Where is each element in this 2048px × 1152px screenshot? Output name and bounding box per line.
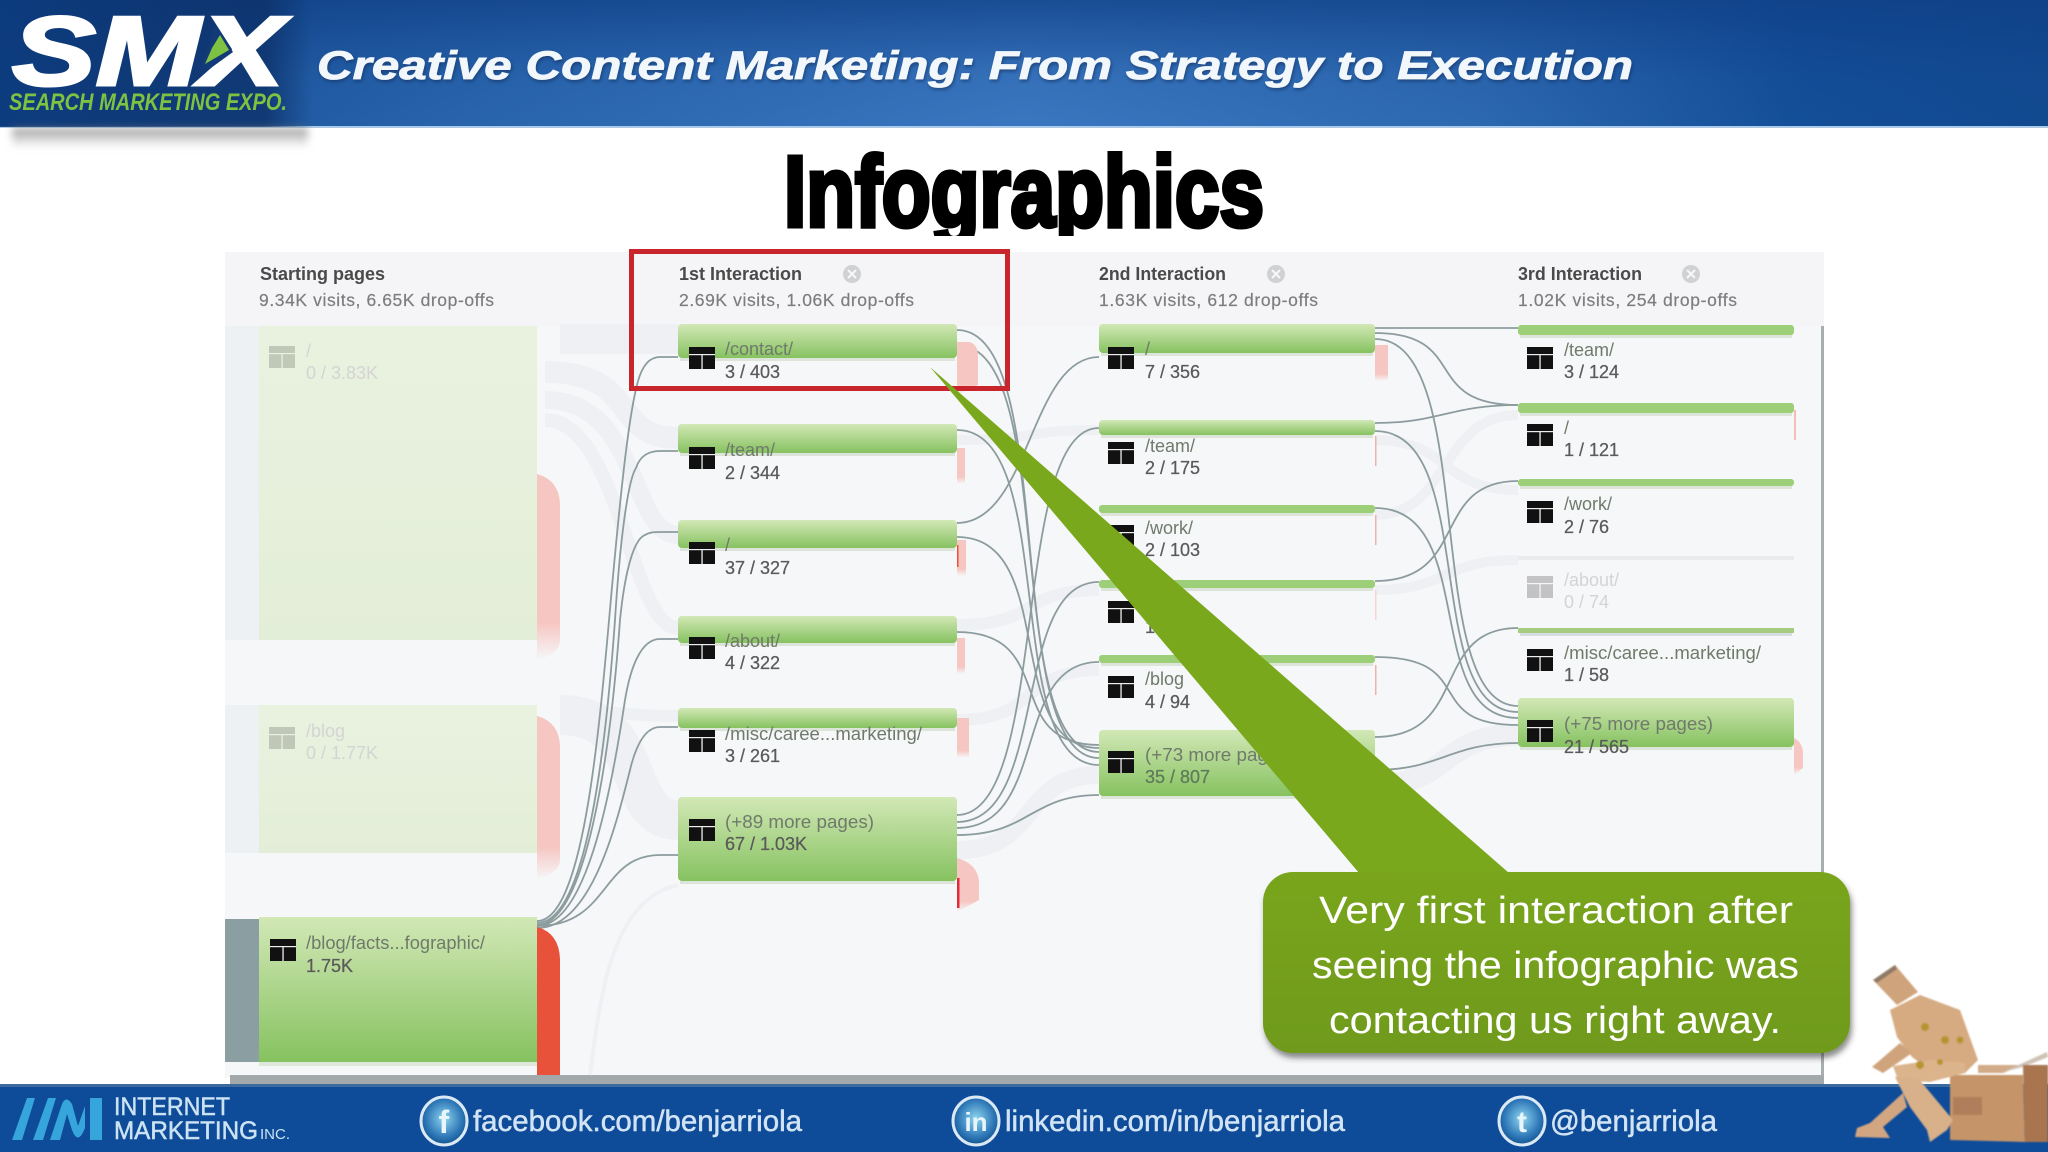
node: (+73 more pages): (+73 more pages) xyxy=(1145,745,1294,765)
node: /blog xyxy=(1099,655,1376,712)
column: 1st interaction xyxy=(678,264,979,912)
node: (+89 more pages) xyxy=(678,797,979,912)
node: /work/ xyxy=(1099,505,1376,560)
node: /team/ xyxy=(678,424,965,484)
node: /team/: 3 / 124 xyxy=(1564,362,1619,382)
node: / (faded): / xyxy=(306,341,311,361)
node: /misc/caree...marketing/: 3 / 261 xyxy=(725,746,780,766)
node: /: 1 / 121 xyxy=(1564,440,1619,460)
node: / xyxy=(1099,324,1388,382)
logo shadow xyxy=(0,0,312,148)
social: linkedin xyxy=(953,1097,1345,1145)
SMX logo xyxy=(9,0,291,116)
node: /: / xyxy=(1564,418,1569,438)
column: 3rd interaction xyxy=(1518,264,1803,775)
social: linkedin: linkedin.com/in/benjarriola xyxy=(1005,1105,1345,1138)
footer bar xyxy=(0,1084,2048,1152)
node: /contact/ xyxy=(678,324,978,395)
header banner xyxy=(0,0,2048,148)
node: /about/: /about/ xyxy=(725,631,780,651)
node: /blog: /blog xyxy=(1145,669,1184,689)
node: /contact/: 3 / 403 xyxy=(725,362,780,382)
social: facebook: f xyxy=(439,1104,450,1140)
node: /team/: /team/ xyxy=(1145,436,1195,456)
heading: 1st interaction: 2.69K visits, 1.06K drop-offs xyxy=(679,290,914,310)
node: /misc/caree...marketing/: /misc/caree...marketing/ xyxy=(1564,643,1761,663)
social: twitter: t xyxy=(1517,1106,1527,1139)
node: /about/ (faded): 0 / 74 xyxy=(1564,592,1609,612)
callout text: seeing the infographic was xyxy=(1312,945,1799,987)
node: /team/ xyxy=(1099,420,1376,478)
heading: starting pages: 9.34K visits, 6.65K drop-offs xyxy=(259,290,494,310)
callout pointer xyxy=(930,367,1517,880)
footer logo: Internet Marketing Inc: MARKETING xyxy=(114,1117,258,1145)
node: /misc/caree...marketing/: /misc/caree...marketing/ xyxy=(725,724,922,744)
flow lines: 1st to 2nd interaction xyxy=(957,330,1099,835)
node: /work/: /work/ xyxy=(1564,494,1612,514)
node: /work/ xyxy=(1518,479,1794,537)
column: starting pages xyxy=(225,264,560,1075)
node: /about/: 4 / 322 xyxy=(725,653,780,673)
node: /contact/: /contact/ xyxy=(725,339,793,359)
node: /work/: 2 / 76 xyxy=(1564,517,1609,537)
heading: 1st interaction xyxy=(679,264,914,310)
heading: 3rd interaction: 3rd Interaction xyxy=(1518,264,1642,284)
heading: 2nd interaction xyxy=(1099,264,1318,310)
node: /: 7 / 356 xyxy=(1145,362,1200,382)
node: (+89 more pages): (+89 more pages) xyxy=(725,812,874,832)
social: twitter: @benjarriola xyxy=(1550,1105,1717,1138)
social: facebook xyxy=(421,1097,802,1145)
node: /team/: /team/ xyxy=(1564,340,1614,360)
flow lines: starting pages to 1st interaction xyxy=(537,357,678,928)
header title: Creative Content Marketing: From Strategy to Execution xyxy=(317,44,1633,88)
icon: cardboard box figure xyxy=(1855,965,2048,1142)
node: /about/ (faded) xyxy=(1518,556,1794,612)
footer logo: Internet Marketing Inc: INTERNET xyxy=(114,1093,230,1121)
highlight box around 1st interaction xyxy=(632,252,1008,388)
heading: 2nd interaction: 1.63K visits, 612 drop-offs xyxy=(1099,290,1318,310)
panel: flow chart xyxy=(225,252,1824,1085)
node: /team/: /team/ xyxy=(725,440,775,460)
node: (+75 more pages) xyxy=(1518,698,1803,775)
node: hidden page behind pointer xyxy=(1099,580,1376,637)
heading: starting pages: Starting pages xyxy=(260,264,385,284)
social: twitter xyxy=(1499,1097,1717,1145)
node: /about/ xyxy=(678,616,965,674)
node: /: 37 / 327 xyxy=(725,558,790,578)
callout box xyxy=(1263,872,1850,1053)
node: / (faded): 0 / 3.83K xyxy=(306,363,378,383)
callout text: Very first interaction after xyxy=(1319,890,1793,932)
node: /misc/caree...marketing/: 1 / 58 xyxy=(1564,665,1609,685)
node: /: / xyxy=(1145,339,1150,359)
node: /work/: 2 / 103 xyxy=(1145,540,1200,560)
node: /team/ xyxy=(1518,325,1794,382)
node: /blog (faded) xyxy=(225,705,560,880)
callout with pointer xyxy=(930,367,1850,1053)
social: linkedin: in xyxy=(964,1107,988,1137)
node: (+89 more pages): 67 / 1.03K xyxy=(725,834,807,854)
social: facebook: facebook.com/benjarriola xyxy=(473,1105,802,1138)
heading: starting pages xyxy=(259,264,494,310)
node: /work/: /work/ xyxy=(1145,518,1193,538)
node: /misc/caree...marketing/ xyxy=(1518,628,1794,685)
node: /blog (faded): /blog xyxy=(306,721,345,741)
node: / xyxy=(1518,403,1796,460)
heading: 3rd interaction: 1.02K visits, 254 drop-offs xyxy=(1518,290,1737,310)
node: /team/: 2 / 175 xyxy=(1145,458,1200,478)
node: /blog/facts...fographic/ xyxy=(225,917,560,1075)
node: / xyxy=(678,520,966,578)
node: /blog: 4 / 94 xyxy=(1145,692,1190,712)
heading: 3rd interaction xyxy=(1518,264,1737,310)
node: (+75 more pages): (+75 more pages) xyxy=(1564,714,1713,734)
footer logo: Internet Marketing Inc xyxy=(12,1093,290,1145)
node: /misc/caree...marketing/ xyxy=(678,708,969,766)
node: / (faded) xyxy=(225,326,560,660)
node: /team/: 2 / 344 xyxy=(725,463,780,483)
column: 2nd interaction xyxy=(1099,264,1388,799)
node: /blog/facts...fographic/: /blog/facts...fographic/ xyxy=(306,933,485,953)
node: /blog/facts...fographic/: 1.75K xyxy=(306,956,353,976)
node: hidden page behind pointer: 1 xyxy=(1145,617,1155,637)
heading: 2nd interaction: 2nd Interaction xyxy=(1099,264,1226,284)
node: (+73 more pages): 35 / 807 xyxy=(1145,767,1210,787)
footer logo: Internet Marketing Inc: INC. xyxy=(260,1126,290,1143)
node: /: / xyxy=(725,535,730,555)
callout text xyxy=(1312,890,1799,1042)
title: Infographics xyxy=(784,136,1264,248)
node: /blog (faded): 0 / 1.77K xyxy=(306,743,378,763)
node: (+75 more pages): 21 / 565 xyxy=(1564,737,1629,757)
heading: 1st interaction: 1st Interaction xyxy=(679,264,802,284)
SMX logo: SEARCH MARKETING EXPO. xyxy=(9,89,287,116)
callout text: contacting us right away. xyxy=(1329,1000,1781,1042)
flow lines: 2nd to 3rd interaction xyxy=(1375,328,1518,770)
node: /about/ (faded): /about/ xyxy=(1564,570,1619,590)
node: (+73 more pages) xyxy=(1099,730,1375,799)
light flow bands xyxy=(545,339,1518,1075)
